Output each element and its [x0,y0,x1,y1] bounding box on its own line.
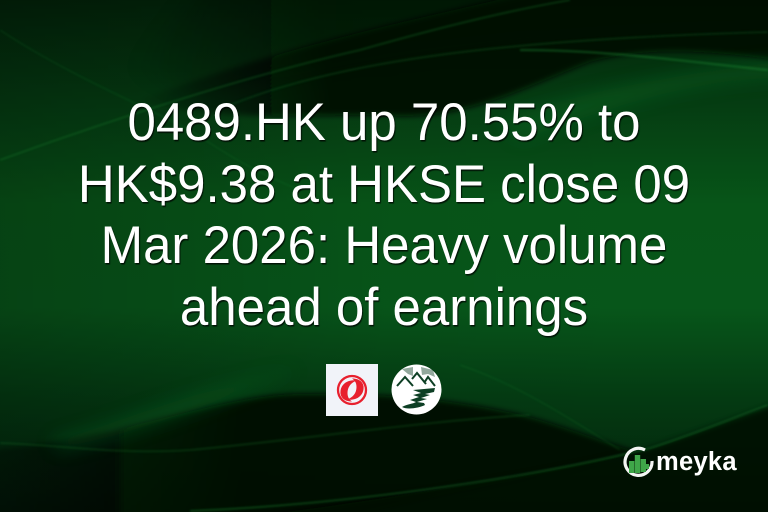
lower left bright band [50,370,300,450]
title: Mar 2026: Heavy volume [101,216,667,275]
bottom dark mound [0,394,640,512]
logo: meyka [623,446,737,477]
fine light streaks [0,0,570,160]
title: ahead of earnings [180,278,588,337]
icon: round mountain and river logo [392,364,442,414]
icon: red company logo on white tile [326,364,378,416]
icon: meyka ring with bars [623,446,654,477]
right-side bright band [500,60,768,140]
top dark lens [130,0,768,100]
title [78,93,690,338]
title: HK$9.38 at HKSE close 09 [78,155,690,214]
title: 0489.HK up 70.55% to [127,93,641,152]
brand name: meyka [656,448,737,476]
